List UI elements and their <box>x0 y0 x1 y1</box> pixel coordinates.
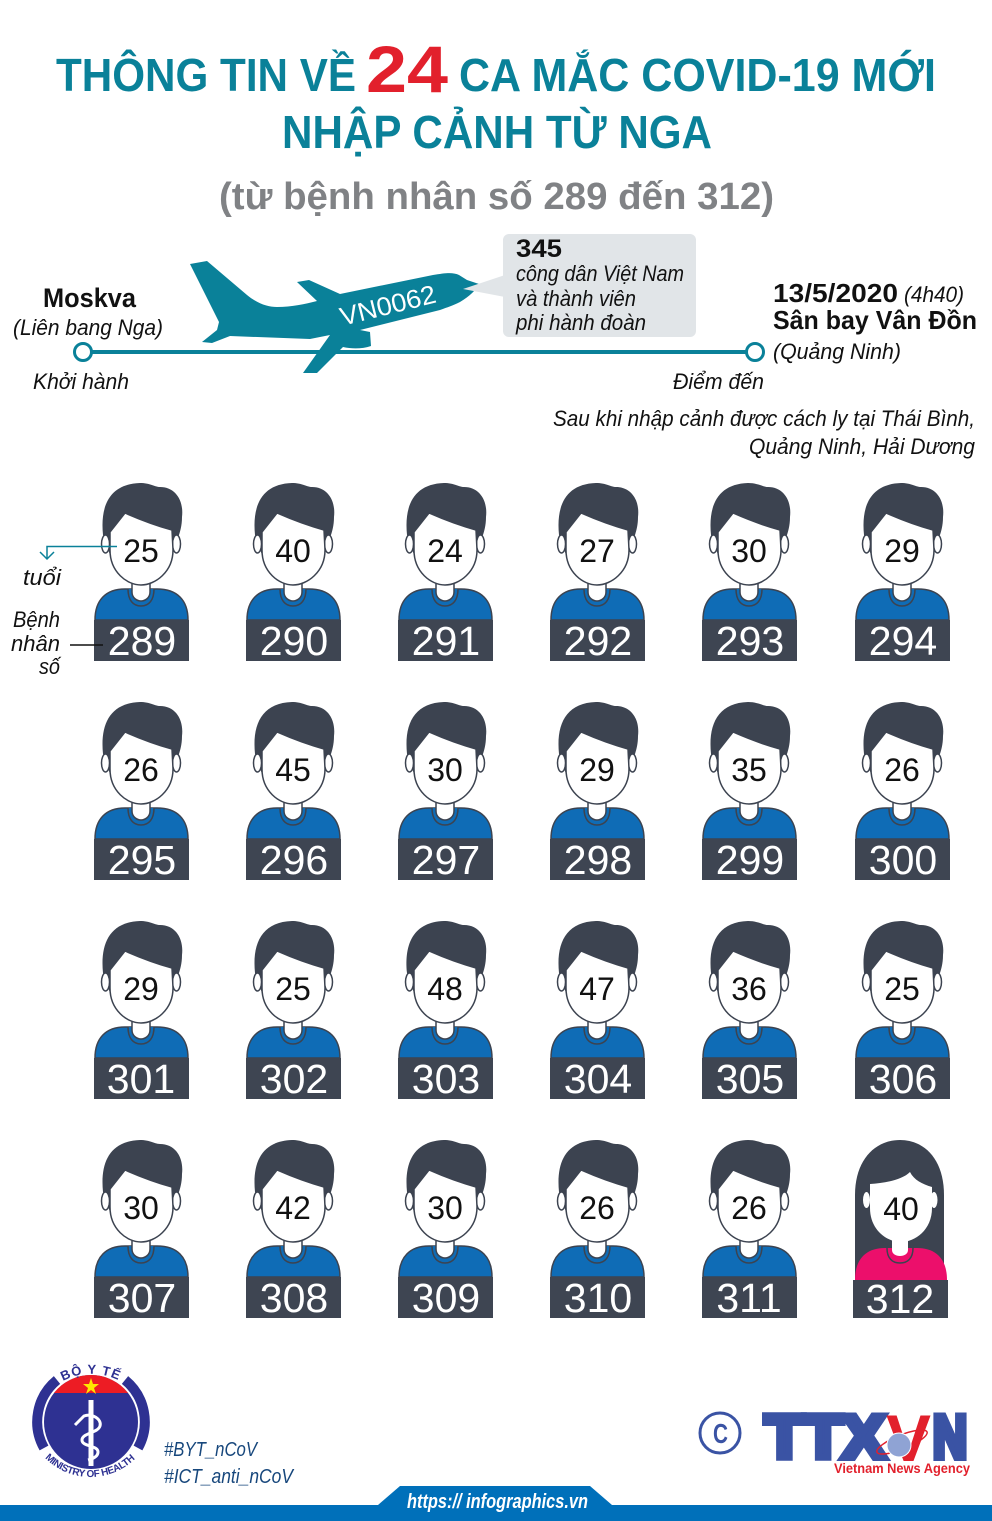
logo: TTXVN: TTX <box>765 1404 885 1470</box>
patient 305 <box>702 921 797 1102</box>
patient 304: 304 <box>564 1056 632 1102</box>
patient 298: 29 <box>579 752 615 788</box>
patient 308: 42 <box>275 1190 311 1226</box>
patient 303: 48 <box>427 971 463 1007</box>
patient 295 <box>94 702 189 883</box>
patient 296 <box>246 702 341 883</box>
callout: 345 passengers: và thành viên <box>516 286 636 311</box>
patient 295: 26 <box>123 752 159 788</box>
patient 298 <box>550 702 645 883</box>
callout: 345 passengers: phi hành đoàn <box>515 310 646 335</box>
logo: TTXVN: V <box>886 1401 931 1475</box>
patient 293: 293 <box>716 618 784 664</box>
legend: patient number: nhân <box>11 631 60 656</box>
patient 307: 30 <box>123 1190 159 1226</box>
logo: TTXVN: Vietnam News Agency <box>834 1460 970 1476</box>
patient 301 <box>94 921 189 1102</box>
title: NHẬP CẢNH TỪ NGA <box>282 106 712 158</box>
hashtags: #ICT_anti_nCoV <box>164 1466 294 1488</box>
footer bar <box>0 1486 992 1521</box>
patient 306: 306 <box>869 1056 937 1102</box>
patient 290: 290 <box>260 618 328 664</box>
patient 303: 303 <box>412 1056 480 1102</box>
departure: Moskva <box>43 283 137 313</box>
patient 290 <box>246 483 341 664</box>
departure: (Liên bang Nga) <box>13 315 163 340</box>
patient 306: 25 <box>884 971 920 1007</box>
patient 300 <box>855 702 950 883</box>
hashtags: #BYT_nCoV <box>164 1439 258 1461</box>
patient 291: 291 <box>412 618 480 664</box>
patient 310: 310 <box>564 1275 632 1321</box>
patient 301: 301 <box>107 1056 175 1102</box>
patient 300: 300 <box>869 837 937 883</box>
patient 294: 29 <box>884 533 920 569</box>
patient 289: 25 <box>123 533 159 569</box>
patient 289: 289 <box>108 618 176 664</box>
quarantine note: Sau khi nhập cảnh được cách ly tại Thái Bình, <box>553 406 975 431</box>
patient 305: 305 <box>716 1056 784 1102</box>
legend: age arrow <box>23 546 117 590</box>
patient 298: 298 <box>564 837 632 883</box>
patient 307 <box>94 1140 189 1321</box>
callout: 345 passengers: 345 <box>516 235 562 263</box>
patient 308 <box>246 1140 341 1321</box>
patient 311 <box>702 1140 797 1321</box>
patient 309: 30 <box>427 1190 463 1226</box>
patient 301: 29 <box>123 971 159 1007</box>
destination: 13/5/2020 <box>773 278 898 308</box>
patient 308: 308 <box>260 1275 328 1321</box>
logo: Ministry of Health <box>32 1364 150 1478</box>
patient 306 <box>855 921 950 1102</box>
hashtags <box>164 1439 294 1488</box>
patient 299: 299 <box>716 837 784 883</box>
destination: Sân bay Vân Đồn <box>773 305 977 335</box>
patient 309 <box>398 1140 493 1321</box>
patient 295: 295 <box>108 837 176 883</box>
patient 312 (woman) <box>853 1140 948 1322</box>
callout: 345 passengers <box>463 234 696 337</box>
title: THÔNG TIN VỀ <box>56 49 356 101</box>
subtitle: (từ bệnh nhân số 289 đến 312) <box>219 176 774 218</box>
patient 299: 35 <box>731 752 767 788</box>
patient 289 <box>94 483 189 664</box>
destination <box>673 278 977 394</box>
patient 305: 36 <box>731 971 767 1007</box>
patient 293 <box>702 483 797 664</box>
patient 312 (woman): 312 <box>866 1276 934 1322</box>
legend: patient number <box>11 607 103 679</box>
patient 292 <box>550 483 645 664</box>
patient 294 <box>855 483 950 664</box>
patient 307: 307 <box>108 1275 176 1321</box>
logo: Ministry of Health: MINISTRY OF HEALTH <box>46 1453 135 1478</box>
patient 296: 296 <box>260 837 328 883</box>
destination: (4h40) <box>904 282 964 307</box>
patient 310: 26 <box>579 1190 615 1226</box>
legend: patient number: Bệnh <box>13 607 60 632</box>
patient 311: 26 <box>731 1190 767 1226</box>
patient 291: 24 <box>427 533 463 569</box>
patient 310 <box>550 1140 645 1321</box>
departure <box>13 283 163 394</box>
patient 297: 30 <box>427 752 463 788</box>
flight route line <box>74 344 764 360</box>
logo: TTXVN <box>765 1401 970 1476</box>
icon: copyright <box>700 1413 740 1453</box>
patient 292: 27 <box>579 533 615 569</box>
title: 24 <box>366 32 448 106</box>
patient 312 (woman): 40 <box>883 1191 919 1227</box>
icon: airplane <box>190 261 479 373</box>
patient 290: 40 <box>275 533 311 569</box>
logo: Ministry of Health: BỘ Y TẾ <box>60 1364 122 1380</box>
patient 294: 294 <box>869 618 937 664</box>
patient 296: 45 <box>275 752 311 788</box>
patient 299 <box>702 702 797 883</box>
callout: 345 passengers: công dân Việt Nam <box>516 261 684 286</box>
patient 302: 302 <box>260 1056 328 1102</box>
icon: airplane: VN0062 <box>337 279 439 332</box>
title <box>56 32 936 158</box>
destination: Điểm đến <box>673 369 764 394</box>
patient 291 <box>398 483 493 664</box>
title: CA MẮC COVID-19 MỚI <box>459 49 936 101</box>
patient 302 <box>246 921 341 1102</box>
patient 302: 25 <box>275 971 311 1007</box>
patient 303 <box>398 921 493 1102</box>
legend: patient number: số <box>39 654 62 679</box>
patient 304 <box>550 921 645 1102</box>
departure: Khởi hành <box>33 369 129 394</box>
footer bar: https:// infographics.vn <box>407 1491 588 1513</box>
patient 292: 292 <box>564 618 632 664</box>
patient 297 <box>398 702 493 883</box>
logo: TTXVN: N <box>933 1404 967 1470</box>
patient 297: 297 <box>412 837 480 883</box>
patient 300: 26 <box>884 752 920 788</box>
patient 311: 311 <box>716 1275 782 1321</box>
quarantine note: Quảng Ninh, Hải Dương <box>749 434 976 459</box>
destination: (Quảng Ninh) <box>773 339 901 364</box>
patient 304: 47 <box>579 971 615 1007</box>
patient 309: 309 <box>412 1275 480 1321</box>
icon: copyright: C <box>713 1418 728 1449</box>
quarantine note <box>553 406 976 459</box>
patient 293: 30 <box>731 533 767 569</box>
legend: age arrow: tuổi <box>23 565 62 590</box>
